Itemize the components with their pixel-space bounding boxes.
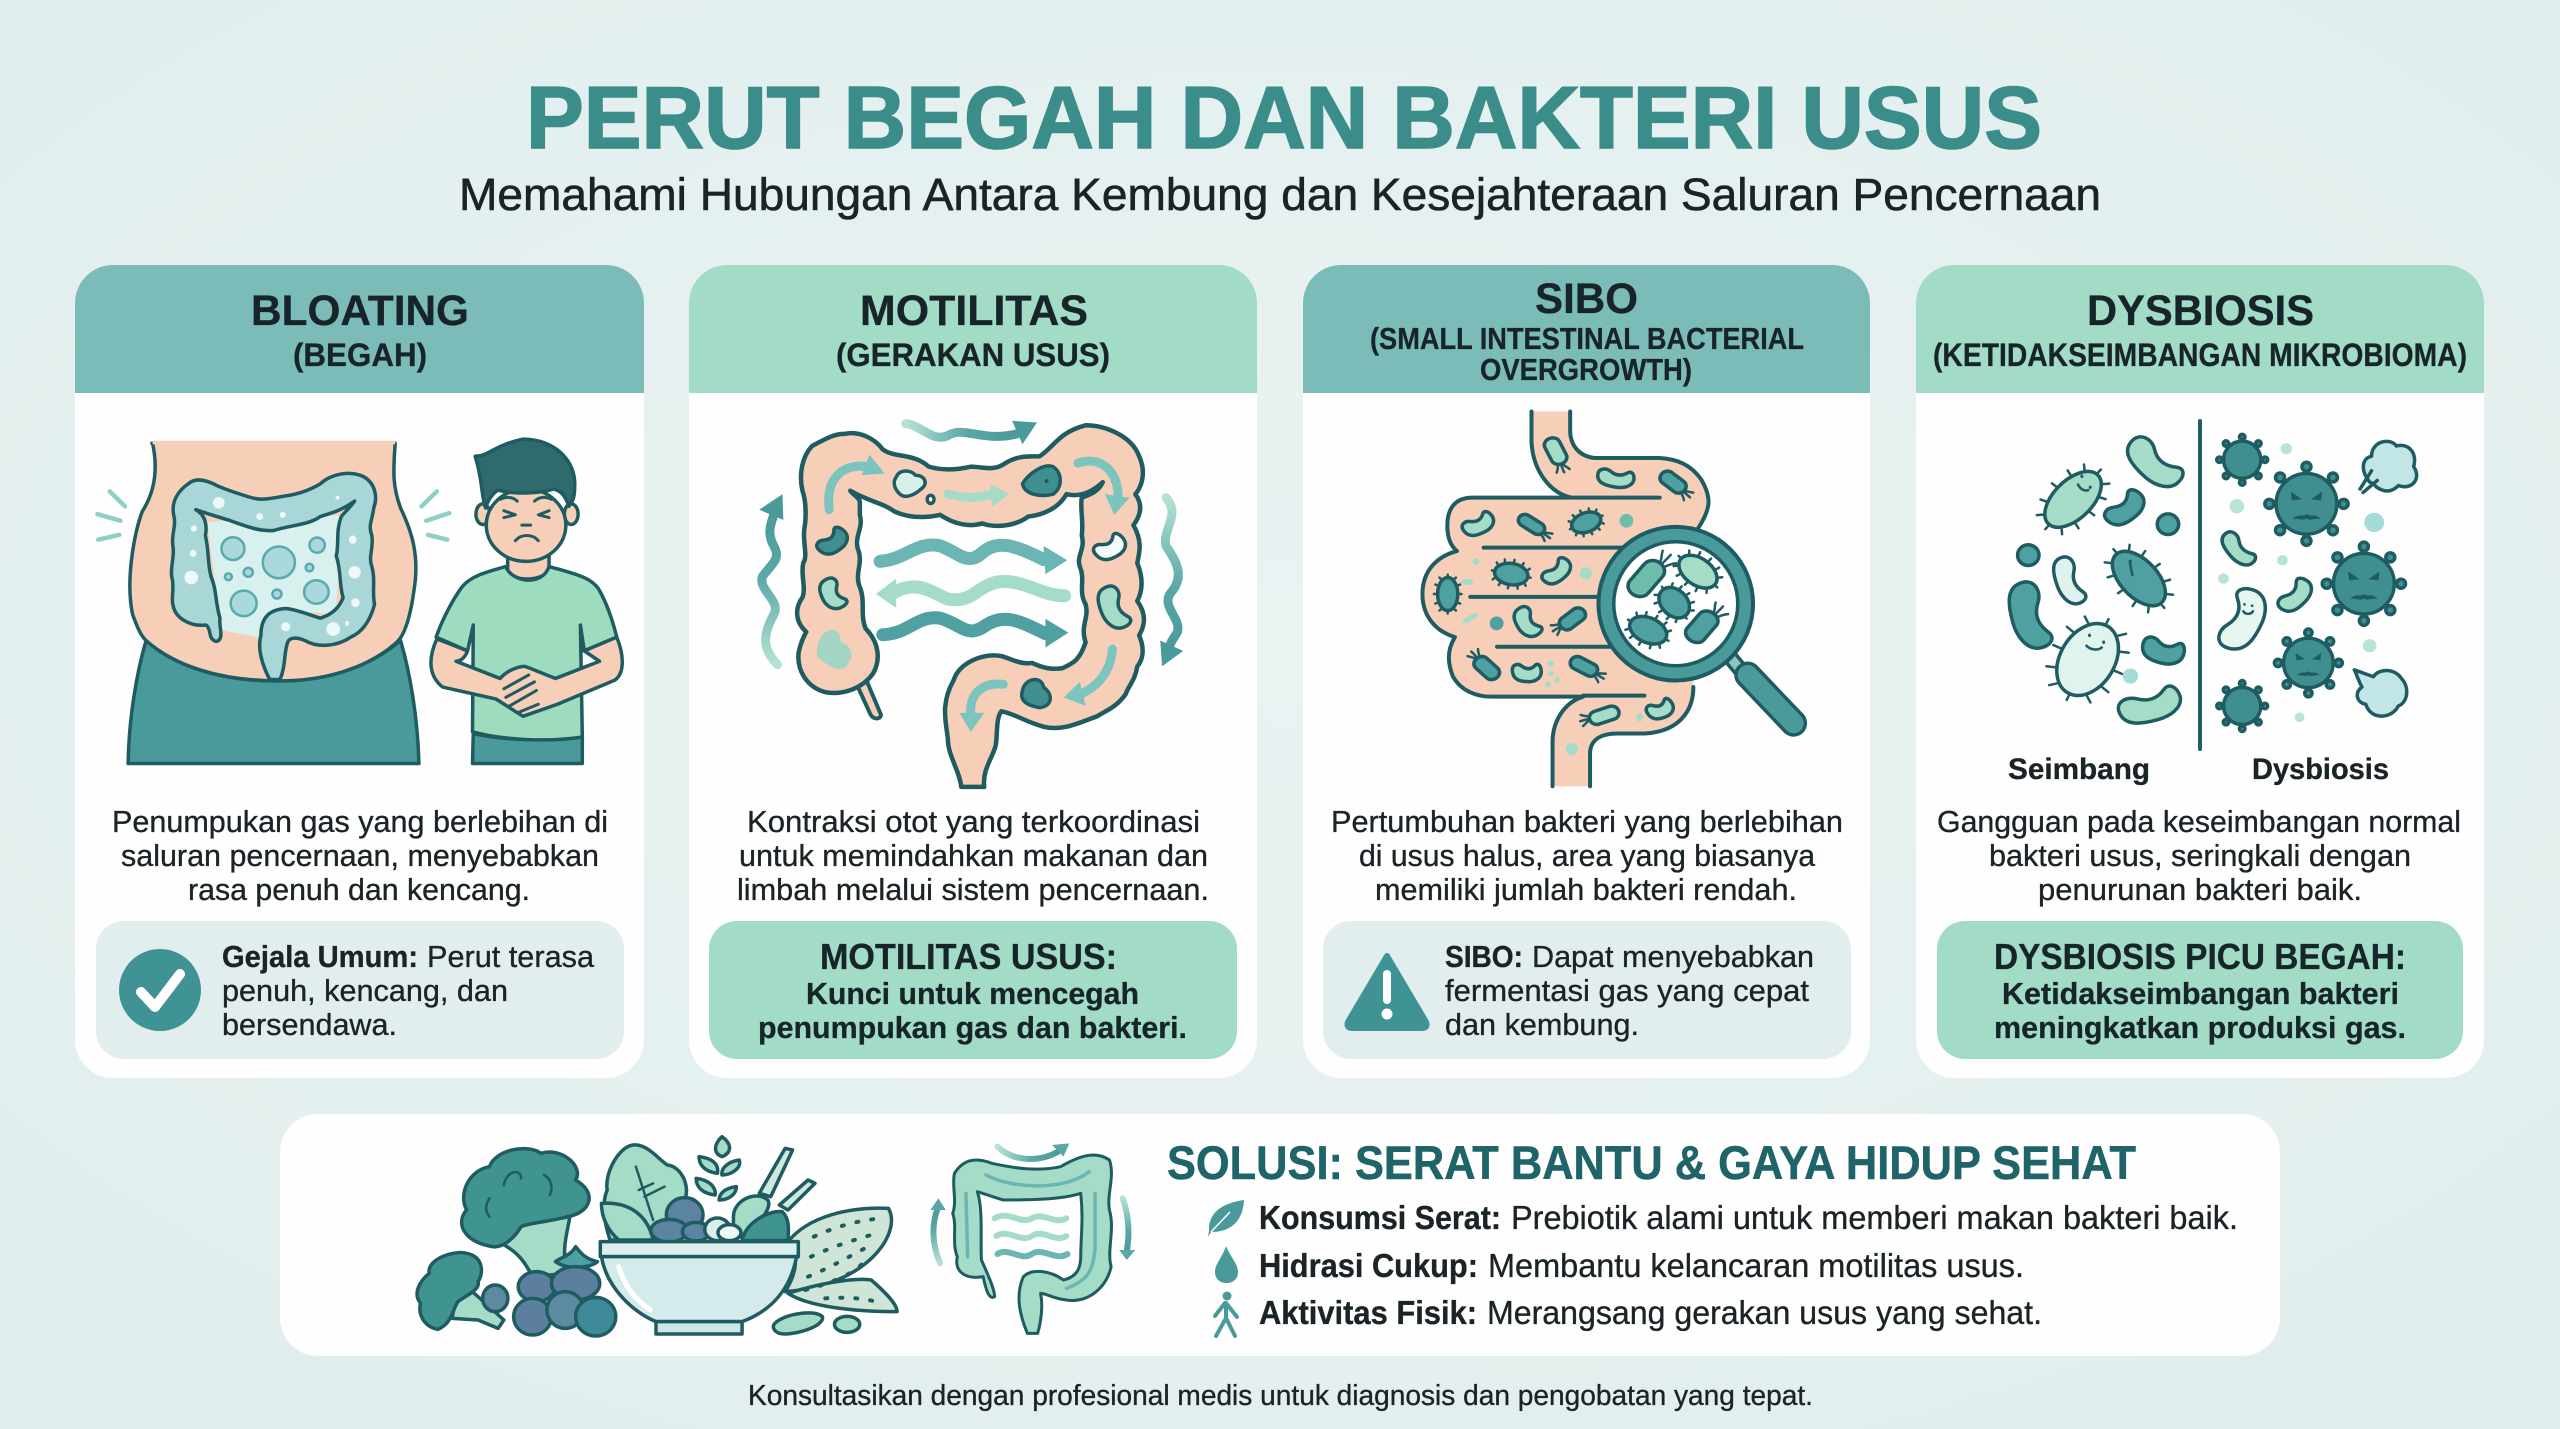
- header: bloating: [75, 265, 644, 393]
- list item: fiber: Konsumsi Serat:: [1259, 1199, 1501, 1236]
- callout: dysbiosis triggers bloating: [1937, 921, 2463, 1059]
- callout: sibo warning: [1323, 921, 1851, 1059]
- body text: dysbiosis: bakteri usus, seringkali dengan: [1989, 838, 2411, 873]
- body text: bloating: Penumpukan gas yang berlebihan di: [112, 804, 608, 839]
- icon: warning triangle: [1348, 956, 1426, 1028]
- header: motilitas: (GERAKAN USUS): [836, 337, 1110, 373]
- header: sibo: SIBO: [1535, 275, 1638, 323]
- label: seimbang: Seimbang: [2008, 753, 2150, 786]
- title: PERUT BEGAH DAN BAKTERI USUS: [526, 68, 2042, 167]
- callout: dysbiosis triggers bloating: meningkatkan produksi gas.: [1994, 1010, 2406, 1045]
- body text: bloating: saluran pencernaan, menyebabkan: [121, 838, 599, 873]
- list item: activity: [1215, 1292, 2042, 1336]
- body text: dysbiosis: Gangguan pada keseimbangan normal: [1937, 804, 2461, 839]
- footer note: Konsultasikan dengan profesional medis untuk diagnosis dan pengobatan yang tepat.: [748, 1380, 1813, 1412]
- illustration: small intestine with bacteria: [1422, 412, 1794, 786]
- header: dysbiosis: [1916, 265, 2484, 393]
- callout: common symptoms: Perut terasa: [427, 939, 595, 974]
- callout: motilitas usus: Kunci untuk mencegah: [806, 976, 1139, 1011]
- callout: dysbiosis triggers bloating: DYSBIOSIS PICU BEGAH:: [1994, 936, 2406, 977]
- icon: check mark: [119, 949, 201, 1031]
- body text: sibo: di usus halus, area yang biasanya: [1359, 838, 1816, 873]
- header: bloating: BLOATING: [251, 287, 469, 335]
- icon: leaf: [1208, 1200, 1244, 1237]
- header: sibo: (SMALL INTESTINAL BACTERIAL: [1370, 321, 1804, 356]
- header: dysbiosis: (KETIDAKSEIMBANGAN MIKROBIOMA): [1933, 337, 2467, 373]
- list item: fiber: [1208, 1199, 2238, 1237]
- list item: hydration: Hidrasi Cukup:: [1259, 1247, 1478, 1284]
- callout: dysbiosis triggers bloating: Ketidakseimbangan bakteri: [2002, 976, 2399, 1011]
- illustration: balanced microbiome: [2000, 433, 2189, 731]
- body text: sibo: [1331, 804, 1843, 907]
- illustration: fiber foods in bowl: [417, 1137, 897, 1336]
- body text: dysbiosis: [1937, 804, 2461, 907]
- body text: sibo: Pertumbuhan bakteri yang berlebihan: [1331, 804, 1843, 839]
- header: sibo: [1303, 265, 1870, 393]
- list item: activity: Aktivitas Fisik:: [1259, 1294, 1477, 1331]
- header: sibo: OVERGROWTH): [1480, 352, 1692, 387]
- panel: motilitas: [689, 265, 1257, 1078]
- list item: fiber: Prebiotik alami untuk memberi makan bakteri baik.: [1511, 1199, 2238, 1236]
- heading: solution: SOLUSI: SERAT BANTU & GAYA HIDUP SEHAT: [1167, 1136, 2136, 1189]
- callout: common symptoms: Gejala Umum:: [222, 939, 418, 974]
- callout: sibo warning: fermentasi gas yang cepat: [1445, 973, 1809, 1008]
- callout: common symptoms: bersendawa.: [222, 1007, 397, 1042]
- body text: motilitas: Kontraksi otot yang terkoordinasi: [747, 804, 1200, 839]
- icon: magnifying glass: [1598, 527, 1794, 723]
- callout: sibo warning: dan kembung.: [1445, 1007, 1639, 1042]
- icon: walking person: [1215, 1292, 1237, 1336]
- header: dysbiosis: DYSBIOSIS: [2087, 287, 2314, 335]
- body text: motilitas: limbah melalui sistem pencernaan.: [737, 872, 1209, 907]
- body text: dysbiosis: penurunan bakteri baik.: [2038, 872, 2362, 907]
- callout: common symptoms: penuh, kencang, dan: [222, 973, 508, 1008]
- callout: motilitas usus: [709, 921, 1237, 1059]
- illustration: colon with motility arrows: [759, 421, 1183, 787]
- subtitle: Memahami Hubungan Antara Kembung dan Kesejahteraan Saluran Pencernaan: [459, 169, 2101, 220]
- label: dysbiosis: Dysbiosis: [2252, 753, 2389, 786]
- body text: sibo: memiliki jumlah bakteri rendah.: [1375, 872, 1797, 907]
- list item: hydration: Membantu kelancaran motilitas usus.: [1488, 1247, 2024, 1284]
- body text: bloating: [112, 804, 608, 907]
- illustration: healthy colon: [930, 1143, 1135, 1333]
- panel: bloating: [75, 265, 644, 1078]
- divider line: [2198, 421, 2202, 749]
- header: bloating: (BEGAH): [293, 337, 427, 373]
- callout: common symptoms: [96, 921, 624, 1059]
- icon: water drop: [1215, 1246, 1238, 1283]
- body text: bloating: rasa penuh dan kencang.: [188, 872, 530, 907]
- callout: motilitas usus: penumpukan gas dan bakteri.: [758, 1010, 1187, 1045]
- callout: sibo warning: Dapat menyebabkan: [1532, 939, 1814, 974]
- panel: sibo: [1303, 265, 1870, 1078]
- illustration: dysbiosis microbiome: [2216, 434, 2417, 731]
- header: motilitas: [689, 265, 1257, 393]
- body text: motilitas: [737, 804, 1209, 907]
- list item: hydration: [1215, 1246, 2024, 1284]
- body text: motilitas: untuk memindahkan makanan dan: [739, 838, 1208, 873]
- panel: solution: [280, 1114, 2280, 1356]
- callout: sibo warning: SIBO:: [1445, 939, 1523, 974]
- panel: dysbiosis: [1916, 265, 2484, 1078]
- callout: motilitas usus: MOTILITAS USUS:: [820, 936, 1117, 977]
- illustration: person holding stomach: [431, 439, 622, 763]
- header: motilitas: MOTILITAS: [860, 287, 1088, 335]
- list item: activity: Merangsang gerakan usus yang sehat.: [1487, 1294, 2042, 1331]
- illustration: bloated abdomen with gas: [97, 441, 449, 763]
